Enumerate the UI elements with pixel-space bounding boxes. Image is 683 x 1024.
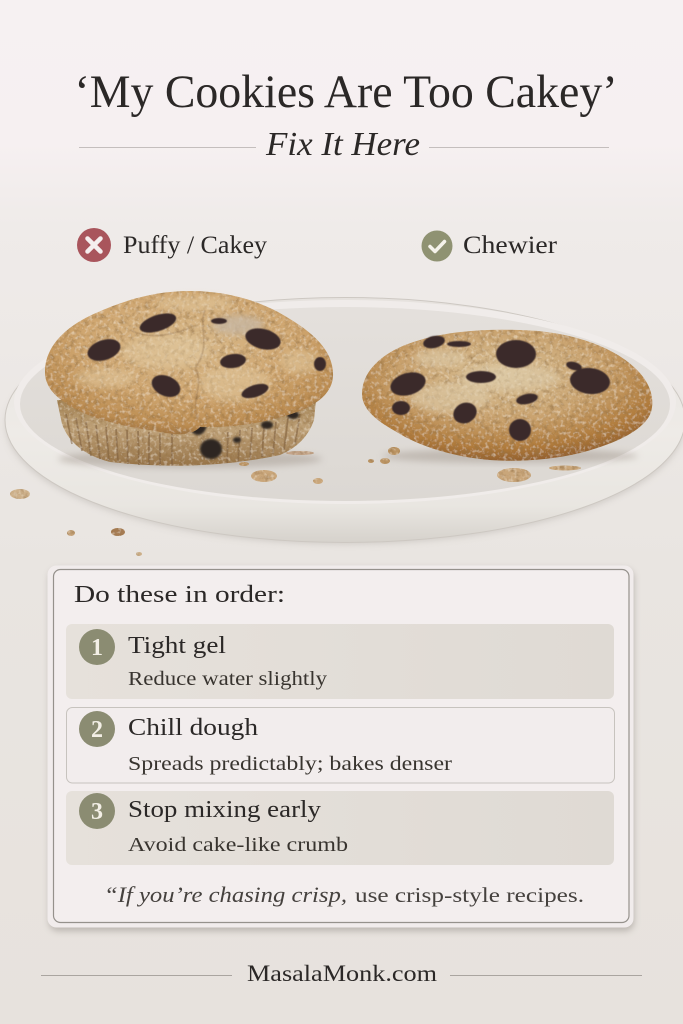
step 1: Tight gel [128,632,226,659]
number badge 1 [79,629,115,665]
legend: puffy / cakey [77,228,268,262]
icon: red cross [77,228,111,262]
legend: puffy / cakey: Puffy / Cakey [123,232,268,259]
note: “If you’re chasing crisp, [104,882,347,907]
step 3: Avoid cake-like crumb [128,834,348,856]
dome [45,291,333,434]
title: ‘My Cookies Are Too Cakey’ [74,66,618,118]
number badge 2: 2 [91,717,103,743]
icon: green check [422,230,452,262]
step 1: Reduce water slightly [128,668,328,690]
subtitle with rules: Fix It Here [265,126,420,163]
note: use crisp-style recipes. [355,883,584,907]
step 3: Stop mixing early [128,796,322,823]
scattered crumbs [10,447,581,556]
number badge 3 [79,793,115,829]
footer brand: MasalaMonk.com [247,961,437,987]
step 3 [66,791,614,865]
number badge 1: 1 [91,635,103,661]
step 2 [66,708,614,783]
panel heading: Do these in order: [74,581,285,608]
step 2: Spreads predictably; bakes denser [128,753,452,775]
flat chewy cookie [362,330,652,463]
paper wrapper base [57,400,316,466]
legend: chewier [422,230,558,262]
step 2: Chill dough [128,714,258,741]
cupcake-like puffy cookie [45,291,333,468]
chocolate chips [388,334,611,441]
dome highlights and cracks [75,296,320,420]
note [104,882,584,907]
chips in wrapper [189,411,299,459]
instruction panel [48,566,634,931]
number badge 2 [79,711,115,747]
cookie highlights [410,349,560,413]
legend: chewier: Chewier [463,232,558,259]
chocolate chips [85,310,326,401]
plate [5,298,683,544]
step 1 [66,624,614,699]
number badge 3: 3 [91,799,103,825]
